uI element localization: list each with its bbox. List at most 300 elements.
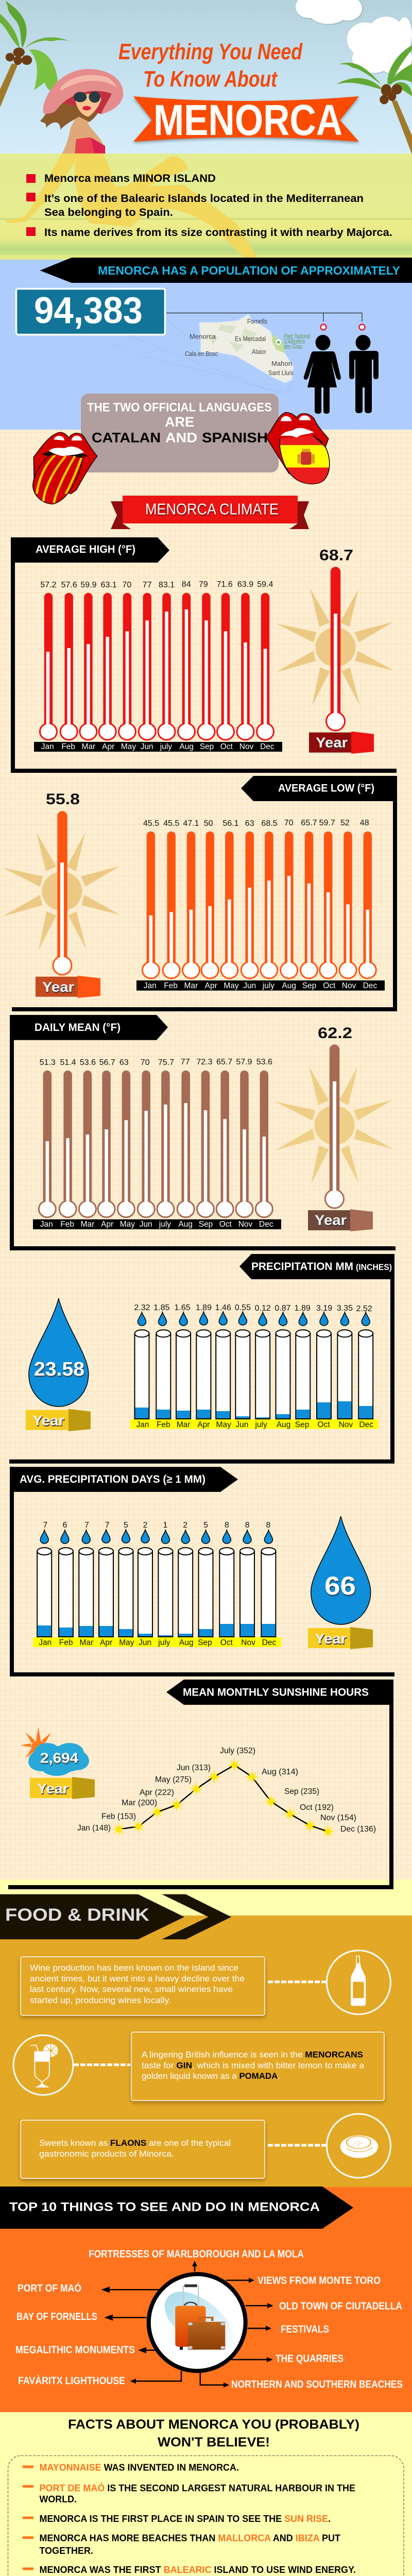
text: facts: MENORCA WAS THE FIRST BALEARIC ISLAND TO USE WIND ENERGY.	[39, 2565, 356, 2575]
month axis: Nov	[238, 1220, 253, 1229]
text: precipitation values: 3.35	[337, 1304, 353, 1313]
heading: menorca climate ribbon: MENORCA CLIMATE	[145, 500, 279, 518]
month axis: Apr	[197, 1420, 210, 1429]
text block: intro bullets: Its name derives from its size contrasting it with nearby Majorca.	[44, 227, 392, 239]
text: precipitation days values: 1	[163, 1521, 167, 1530]
month axis: May	[224, 981, 239, 990]
callout: population figure: 94,383	[34, 290, 143, 331]
month axis: Dec	[359, 1420, 373, 1429]
panel: food and drink	[0, 1894, 412, 2188]
text: monthly high values: 84	[182, 580, 191, 589]
text: precipitation days values	[43, 1521, 270, 1530]
month axis: Sep	[199, 1220, 213, 1229]
connector: wine dashes	[268, 1980, 326, 1983]
text: precipitation values: 1.65	[175, 1303, 191, 1312]
text block: gin: taste for GIN, which is mixed with bitter lemon to make a	[142, 2061, 365, 2070]
icon: catalan flag tongue	[33, 432, 97, 504]
text block: wine: started up, producing wines locally.	[30, 1996, 171, 2005]
text: precipitation days values: 5	[203, 1521, 208, 1530]
heading: precipitation: PRECIPITATION MM	[251, 1261, 353, 1273]
text: daily mean values	[40, 1058, 272, 1067]
text: facts: MENORCA IS THE FIRST PLACE IN SPAIN TO SEE THE SUN RISE.	[39, 2514, 331, 2524]
month axis: May	[121, 742, 136, 751]
frame	[13, 537, 397, 771]
connector: gin dashes	[74, 2063, 130, 2066]
panel: average low	[3, 776, 397, 1009]
year block: Year	[315, 1631, 347, 1647]
background	[0, 2412, 412, 2576]
text: sunshine values: Aug (314)	[262, 1768, 298, 1776]
text: daily mean values: 57.9	[236, 1058, 252, 1066]
text: sunshine values: Dec (136)	[340, 1825, 376, 1834]
chart: sunshine line	[111, 1757, 336, 1840]
text: sunshine values: Oct (192)	[300, 1803, 334, 1812]
icon: spanish flag tongue	[266, 412, 330, 484]
text: facts	[39, 2463, 356, 2575]
month axis: May	[120, 1220, 135, 1229]
text: monthly high values	[40, 580, 273, 589]
panel: population background	[0, 260, 412, 430]
panel: hero	[0, 0, 412, 260]
text: daily mean values: 63	[119, 1058, 129, 1067]
icon: right palm tree	[336, 45, 412, 155]
month axis: Sep	[198, 1638, 212, 1647]
month axis: May	[216, 1420, 231, 1429]
chart: daily mean thermometers	[39, 1075, 272, 1217]
title: everything you need to know about: To Know About	[143, 66, 278, 92]
text: monthly low values: 56.1	[222, 819, 239, 828]
panel: official languages: SPANISH	[202, 430, 268, 446]
bullet markers	[23, 2466, 33, 2570]
icon: left palm tree	[0, 1, 70, 107]
connector: flaons dashes	[268, 2144, 326, 2146]
background	[0, 1916, 412, 2188]
month axis: Sep	[200, 742, 214, 751]
sky background	[0, 0, 412, 154]
dashed facts box	[8, 2455, 404, 2576]
month axis: Sep	[295, 1420, 309, 1429]
month axis: Jan	[41, 742, 54, 751]
text: monthly high values: 57.2	[40, 581, 57, 589]
heading: top 10 things: TOP 10 THINGS TO SEE AND DO IN MENORCA	[9, 2200, 320, 2214]
text: daily mean values: 72.3	[196, 1058, 213, 1066]
icon: sun and cloud	[20, 1727, 89, 1776]
yearly thermometer: 62.2	[318, 1025, 352, 1042]
frame	[12, 776, 395, 1009]
heading: population ribbon	[40, 258, 412, 283]
month axis: Feb	[164, 981, 178, 990]
panel: official languages	[81, 394, 279, 472]
month axis	[33, 1219, 281, 1229]
month axis: Aug	[179, 742, 194, 751]
month axis: Jun	[243, 981, 256, 990]
chart: monthly highs thermometers	[40, 597, 274, 740]
text block: intro bullets: Sea belonging to Spain.	[44, 207, 173, 218]
icon: wine bottle	[327, 1951, 390, 2014]
text: monthly high values: 70	[123, 581, 131, 589]
text: daily mean values: 51.4	[60, 1058, 76, 1067]
text: precipitation days values: 6	[63, 1521, 67, 1530]
month axis: Dec	[260, 742, 274, 751]
heading: precipitation: (INCHES)	[356, 1262, 392, 1272]
month axis: Sep	[302, 981, 316, 990]
title: everything you need to know about: Everything You Need	[118, 39, 303, 64]
text: sunshine values: May (275)	[155, 1775, 192, 1784]
heading: average low: AVERAGE LOW (°F)	[278, 783, 374, 794]
text: precipitation days values: 7	[105, 1521, 110, 1530]
background: pale yellow divider	[0, 1879, 412, 1916]
panel: top 10 things	[0, 2187, 412, 2412]
heading: population ribbon: MENORCA HAS A POPULATION OF APPROXIMATELY	[98, 264, 400, 277]
month axis: Oct	[220, 1638, 233, 1647]
month axis: Nov	[241, 1638, 255, 1647]
month axis: Aug	[178, 1220, 193, 1229]
text: attractions: VIEWS FROM MONTE TORO	[258, 2275, 381, 2286]
icon: luggage in circle	[149, 2274, 246, 2371]
text: facts: PORT DE MAÓ IS THE SECOND LARGEST NATURAL HARBOUR IN THE	[39, 2482, 355, 2493]
text: monthly low values: 63	[245, 819, 254, 828]
text block: intro bullets: It’s one of the Balearic Islands located in the Mediterranean	[44, 193, 364, 205]
text: precipitation values: 0.87	[274, 1304, 291, 1313]
text block: wine: ancient times, but it went into a heavy decline over the	[30, 1974, 245, 1984]
text: precipitation days values: 8	[266, 1521, 270, 1530]
text: sunshine values: Jan (148)	[77, 1824, 111, 1833]
year block: Year	[32, 1413, 64, 1429]
text: map place names	[185, 318, 311, 377]
icon: cocktail glass	[13, 2035, 73, 2095]
text: map place names: S'Albufera	[284, 338, 305, 345]
month axis: Aug	[179, 1638, 193, 1647]
text: attractions: FORTRESSES OF MARLBOROUGH AND LA MOLA	[89, 2249, 304, 2260]
text: precipitation values: 1.89	[295, 1304, 311, 1313]
heading: top 10 things	[0, 2187, 353, 2229]
connector: box to figures	[166, 313, 362, 321]
text: map place names: Cala en Bosc	[185, 350, 218, 358]
text: precipitation values: 0.12	[255, 1304, 271, 1313]
icon: yearly rain drop: 23.58	[34, 1359, 84, 1380]
heading: daily mean	[10, 1015, 168, 1040]
month axis: Oct	[323, 981, 336, 990]
icon: yearly rain drop	[311, 1516, 371, 1624]
month axis: Apr	[101, 1220, 113, 1229]
text: sunshine values: Apr (222)	[140, 1788, 174, 1797]
frame	[12, 1467, 394, 1674]
text: monthly high values: 59.9	[80, 581, 97, 589]
text block: wine	[21, 1957, 265, 2015]
text: daily mean values: 65.7	[216, 1058, 232, 1066]
month axis: Mar	[82, 742, 95, 751]
text: monthly high values: 79	[199, 580, 208, 589]
panel: precipitation days	[10, 1467, 394, 1674]
text: monthly high values: 63.9	[237, 580, 253, 589]
month axis: Dec	[259, 1220, 273, 1229]
yearly thermometer: 55.8	[46, 791, 80, 808]
heading: menorca climate ribbon	[111, 496, 309, 529]
text: attractions: FAVÀRITX LIGHTHOUSE	[18, 2375, 125, 2387]
text: sunshine values: Nov (154)	[320, 1814, 356, 1822]
text block: flaons: gastronomic products of Minorca.	[39, 2149, 174, 2159]
month axis: Jan	[144, 981, 157, 990]
month axis: Oct	[318, 1420, 330, 1429]
month axis: Jun	[139, 1638, 151, 1647]
month axis: Jun	[141, 742, 153, 751]
frame	[8, 1680, 391, 1887]
text: monthly low values: 65.7	[301, 819, 317, 827]
text: precipitation days values: 5	[124, 1521, 128, 1530]
year block: Year	[37, 1781, 68, 1797]
month axis: Aug	[282, 981, 296, 990]
month axis: Mar	[177, 1420, 190, 1429]
text: map place names: Alaior	[252, 348, 266, 355]
text: precipitation days values: 8	[245, 1521, 250, 1530]
heading: precipitation	[239, 1254, 394, 1279]
text: attractions: FESTIVALS	[281, 2324, 329, 2335]
text: facts: MENORCA HAS MORE BEACHES THAN MALLORCA AND IBIZA PUT	[39, 2533, 340, 2544]
panel: sunshine hours	[8, 1680, 393, 1887]
heading: food and drink: FOOD & DRINK	[5, 1905, 149, 1925]
month axis: May	[119, 1638, 134, 1647]
text: monthly low values	[143, 819, 369, 828]
icon: clouds	[296, 0, 412, 74]
month axis: Mar	[184, 981, 198, 990]
text: precipitation days values: 2	[143, 1521, 148, 1530]
banner: menorca: MENORCA	[153, 96, 342, 144]
heading: sunshine hours: MEAN MONTHLY SUNSHINE HOURS	[183, 1687, 369, 1699]
text: precipitation values: 2.52	[356, 1304, 372, 1313]
yearly thermometer: 68.7	[319, 547, 353, 564]
icon: yearly rain drop: 66	[324, 1571, 356, 1600]
text: daily mean values: 77	[181, 1058, 190, 1066]
year block	[30, 1777, 95, 1799]
text: monthly high values: 83.1	[159, 581, 175, 589]
text: precipitation days values: 8	[225, 1521, 229, 1530]
month axis: Jun	[235, 1420, 248, 1429]
heading: precipitation days	[10, 1467, 238, 1492]
text: attractions: BAY OF FORNELLS	[16, 2311, 97, 2323]
month axis: Nov	[239, 742, 254, 751]
panel: official languages: AND	[165, 430, 197, 446]
icon: flaon pastry	[327, 2114, 390, 2178]
text: monthly high values: 77	[143, 581, 152, 589]
heading: average low	[241, 776, 397, 801]
text: monthly low values: 47.1	[183, 819, 199, 828]
month axis: Oct	[219, 1220, 232, 1229]
text: monthly low values: 68.5	[261, 819, 278, 828]
heading: food and drink	[0, 1894, 231, 1939]
month axis: Oct	[220, 742, 233, 751]
text: sunshine values	[77, 1747, 376, 1834]
month axis: july	[158, 1638, 170, 1647]
month axis: july	[262, 981, 274, 990]
yearly thermometer	[319, 547, 353, 731]
text: monthly high values: 71.6	[217, 580, 233, 589]
panel: climate grid background	[0, 430, 412, 1879]
text: map place names: Es Mercadal	[235, 335, 266, 343]
map: menorca island	[113, 285, 311, 393]
text block: intro bullets	[26, 173, 392, 239]
month axis: Feb	[59, 1638, 73, 1647]
icon: sun and cloud: 2,694	[40, 1750, 78, 1766]
text: facts: WORLD.	[39, 2494, 77, 2504]
arrows: luggage to attractions	[104, 2264, 270, 2385]
month axis: Jun	[140, 1220, 152, 1229]
month axis	[130, 1419, 379, 1429]
panel: precipitation	[9, 1254, 394, 1462]
month axis	[34, 742, 282, 752]
text: precipitation values: 0.55	[235, 1303, 251, 1312]
text: precipitation days values: 7	[84, 1521, 89, 1530]
text: facts: TOGETHER.	[39, 2546, 93, 2556]
text: precipitation values	[134, 1303, 372, 1313]
figure: legs behind meadow	[5, 154, 258, 258]
chart: monthly precipitation cylinders	[135, 1312, 373, 1419]
text block: gin: A lingering British influence is seen in the MENORCANS	[142, 2050, 363, 2059]
month axis	[136, 980, 385, 991]
month axis: Feb	[157, 1420, 170, 1429]
icon: sun	[275, 1066, 393, 1184]
icon: sun	[3, 833, 121, 950]
text: monthly low values: 50	[204, 819, 213, 828]
text: map place names: Fornells	[247, 318, 267, 325]
text: precipitation values: 2.32	[134, 1303, 150, 1312]
text: daily mean values: 51.3	[40, 1058, 56, 1067]
callout: population figure	[16, 289, 165, 335]
text: map place names: Sant Lluís	[268, 369, 294, 377]
icon: yearly rain drop	[29, 1298, 89, 1406]
text: sunshine values: Jun (313)	[177, 1764, 211, 1772]
chart: precipitation days cylinders	[37, 1530, 276, 1637]
text: daily mean values: 56.7	[99, 1058, 115, 1067]
panel: average high	[11, 537, 397, 771]
month axis: Nov	[339, 1420, 353, 1429]
text: sunshine values: Sep (235)	[284, 1787, 319, 1796]
month axis: Apr	[100, 1638, 112, 1647]
text: daily mean values: 70	[141, 1058, 150, 1067]
month axis: july	[254, 1420, 267, 1429]
text: monthly high values: 57.6	[61, 581, 77, 589]
heading: daily mean: DAILY MEAN (°F)	[35, 1022, 121, 1033]
meadow	[0, 154, 412, 260]
month axis: Jan	[40, 1220, 53, 1229]
panel: facts	[0, 2412, 412, 2576]
text: monthly high values: 63.1	[101, 581, 117, 589]
year block	[309, 732, 374, 754]
text block: wine: Wine production has been known on the island since	[30, 1963, 238, 1973]
month axis: Feb	[60, 1220, 74, 1229]
text: map place names: Parc Natural	[284, 333, 311, 340]
text: precipitation values: 1.46	[215, 1303, 231, 1312]
heading: precipitation days: AVG. PRECIPITATION DAYS (≥ 1 MM)	[20, 1473, 205, 1485]
month axis: Apr	[102, 742, 114, 751]
icon: male figure	[349, 325, 379, 413]
year block: Year	[42, 979, 74, 995]
month axis: Jan	[39, 1638, 52, 1647]
year block: Year	[316, 735, 348, 751]
month axis: Dec	[363, 981, 377, 990]
month axis: Mar	[81, 1220, 94, 1229]
text: precipitation days values: 7	[43, 1521, 47, 1530]
yearly thermometer	[46, 791, 80, 975]
text: map place names: Menorca	[190, 333, 216, 340]
panel: official languages: ARE	[165, 414, 194, 430]
icon: sun	[276, 588, 394, 706]
heading: average high	[11, 537, 169, 563]
month axis: Apr	[205, 981, 217, 990]
icon: female figure	[304, 325, 341, 414]
frame	[9, 1254, 392, 1462]
text: precipitation days values: 2	[183, 1521, 187, 1530]
month axis: Jan	[136, 1420, 149, 1429]
text: sunshine values: Mar (200)	[122, 1799, 157, 1807]
text: daily mean values: 53.6	[256, 1058, 272, 1066]
text block: flaons: Sweets known as FLAONS are one of the typical	[39, 2139, 231, 2148]
text: sunshine values: Feb (153)	[101, 1812, 136, 1821]
yearly thermometer	[318, 1025, 352, 1208]
text block: flaons	[21, 2120, 265, 2178]
arrowheads	[101, 2261, 273, 2387]
heading: sunshine hours	[166, 1680, 393, 1705]
panel: official languages: THE TWO OFFICIAL LANGUAGES	[87, 401, 272, 415]
chart: monthly lows thermometers	[142, 836, 376, 978]
text: daily mean values: 53.6	[80, 1058, 96, 1067]
text: facts: MAYONNAISE WAS INVENTED IN MENORCA.	[39, 2463, 239, 2473]
year block: Year	[315, 1212, 347, 1228]
text: monthly low values: 52	[340, 819, 350, 827]
text: map place names: des Grau	[284, 343, 302, 350]
panel: daily mean	[10, 1015, 396, 1248]
text block: gin	[131, 2032, 384, 2100]
text: precipitation values: 1.85	[153, 1303, 169, 1312]
heading: facts	[68, 2417, 359, 2449]
text: monthly low values: 70	[284, 819, 294, 827]
text: attractions: PORT OF MAÓ	[18, 2282, 81, 2294]
year block	[36, 976, 100, 998]
text block: wine: last century. Now, several new, small wineries have	[30, 1985, 233, 1994]
month axis	[33, 1637, 281, 1647]
heading: facts: WON'T BELIEVE!	[158, 2435, 270, 2449]
month axis: Nov	[342, 981, 356, 990]
month axis: july	[160, 742, 172, 751]
text: monthly high values: 59.4	[257, 580, 273, 589]
month axis: Feb	[61, 742, 75, 751]
text: attractions: THE QUARRIES	[276, 2353, 344, 2364]
text: monthly low values: 45.5	[143, 819, 159, 828]
text: sunshine values: July (352)	[220, 1747, 255, 1755]
text block: intro bullets: Menorca means MINOR ISLAND	[44, 173, 216, 184]
text: precipitation values: 3.19	[316, 1304, 332, 1313]
year block	[26, 1409, 91, 1431]
panel: official languages: CATALAN	[92, 430, 161, 446]
background	[0, 2187, 412, 2412]
month axis: Mar	[80, 1638, 93, 1647]
month axis: Dec	[262, 1638, 276, 1647]
frame	[12, 1015, 396, 1248]
text block: gin: golden liquid known as a POMADA.	[142, 2072, 280, 2081]
text: precipitation values: 1.89	[196, 1303, 212, 1312]
title: everything you need to know about	[118, 39, 303, 92]
text: monthly low values: 59.7	[319, 819, 335, 827]
text: attractions	[15, 2249, 403, 2390]
icon: woman in sun hat	[41, 69, 123, 154]
text: monthly low values: 48	[360, 819, 369, 827]
heading: average high: AVERAGE HIGH (°F)	[36, 544, 135, 555]
text: attractions: MEGALITHIC MONUMENTS	[15, 2345, 135, 2356]
month axis: Aug	[277, 1420, 290, 1429]
year block	[308, 1627, 373, 1649]
text: daily mean values: 75.7	[158, 1058, 174, 1067]
text: map place names: Mahon	[271, 360, 292, 367]
year block	[308, 1209, 373, 1231]
